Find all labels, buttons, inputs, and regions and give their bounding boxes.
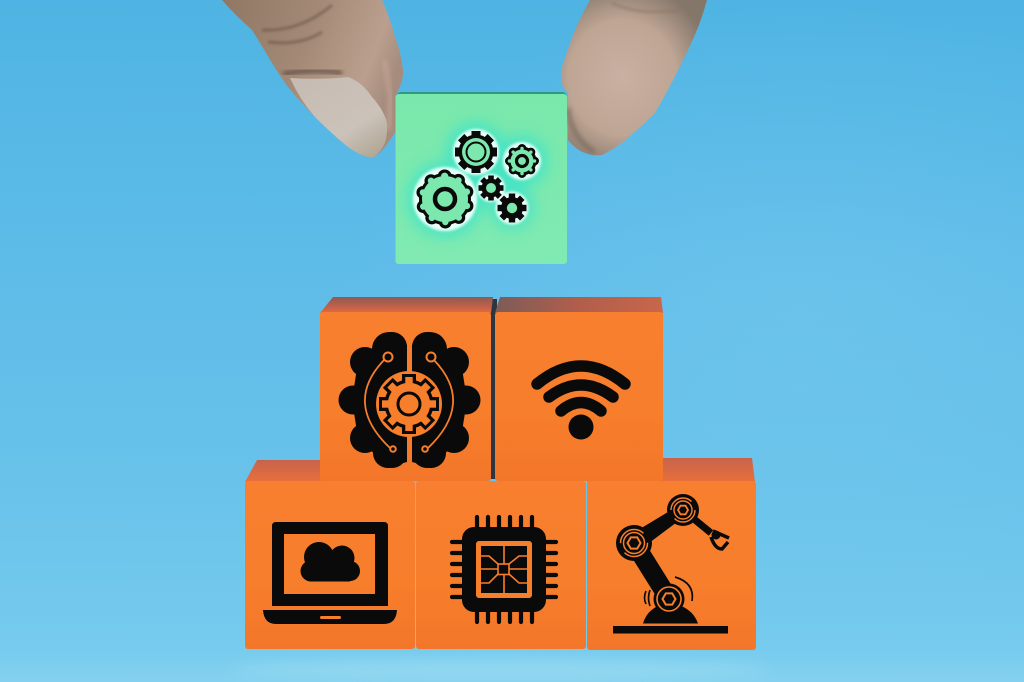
icon: brain with gear — [338, 332, 480, 468]
block: robot arm — [587, 458, 756, 650]
icon: wifi — [537, 366, 625, 440]
icon: lower small gear — [498, 194, 526, 222]
icon: upper right gear — [508, 146, 536, 176]
icon: chip — [452, 517, 556, 622]
green gear block — [396, 92, 567, 264]
block: processor chip — [416, 481, 586, 649]
icon: elbow joint — [616, 525, 652, 561]
icon: robot arm — [613, 494, 729, 634]
icon: small gear — [478, 176, 504, 200]
block: wifi — [495, 297, 663, 481]
block: laptop — [245, 460, 415, 649]
icon: cloud — [300, 542, 360, 582]
left thumb — [222, 0, 403, 158]
icon: central gear — [379, 374, 439, 434]
right thumb — [561, 0, 707, 155]
icon: large gear — [419, 173, 471, 225]
gear glow — [407, 122, 548, 237]
icon: top joint — [667, 494, 699, 526]
gap between upper blocks — [489, 299, 497, 479]
icon: medium gear — [455, 131, 497, 173]
block: brain with gear — [320, 297, 493, 481]
thumbnail — [290, 77, 387, 158]
icon: lower joint — [654, 584, 684, 614]
icon: laptop with cloud — [263, 522, 397, 624]
